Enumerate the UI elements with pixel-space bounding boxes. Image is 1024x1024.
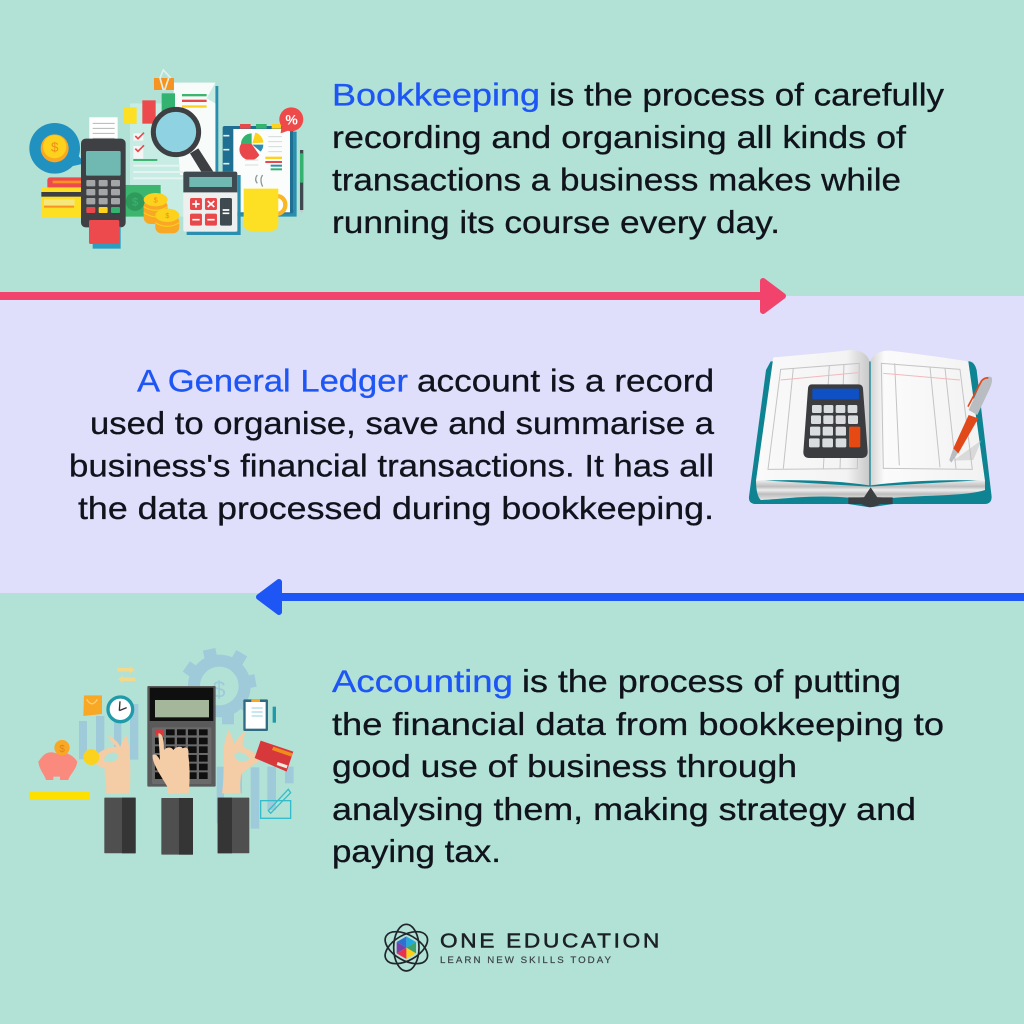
icon: accounting illustration xyxy=(29,648,294,855)
credit cards xyxy=(47,177,91,207)
text block: general ledger definition: account is a record xyxy=(417,362,714,398)
middle sleeve xyxy=(161,798,193,855)
red credit card xyxy=(255,741,293,772)
logo: One Education xyxy=(380,924,662,971)
piggy bank xyxy=(38,740,77,780)
arrow: red pointing right xyxy=(0,281,783,311)
text block: accounting definition: Accounting xyxy=(332,663,513,699)
cheque xyxy=(261,789,291,818)
background bars xyxy=(79,704,294,829)
text block: bookkeeping definition: recording and organising all kinds of xyxy=(332,119,906,155)
pie chart xyxy=(241,133,252,144)
exchange arrows xyxy=(117,666,135,683)
text block: general ledger definition: the data processed during bookkeeping. xyxy=(78,490,714,526)
right hand xyxy=(222,730,259,793)
checklist clipboard xyxy=(243,699,268,731)
text block: accounting definition: the financial data from bookkeeping to xyxy=(332,706,944,742)
left hand xyxy=(94,735,130,793)
percent badge xyxy=(279,107,303,131)
magnifier xyxy=(190,148,213,175)
coin xyxy=(83,749,99,765)
text block: bookkeeping definition xyxy=(332,76,944,240)
shopping bag xyxy=(83,695,102,716)
page block xyxy=(756,480,985,500)
text block: accounting definition: is the process of putting xyxy=(522,663,901,699)
text block: general ledger definition: business's financial transactions. It has all xyxy=(69,448,714,484)
text block: general ledger definition: used to organise, save and summarise a xyxy=(90,405,715,441)
inserted red card xyxy=(93,227,121,249)
book spine clasp xyxy=(848,487,893,507)
left page xyxy=(756,350,869,485)
text block: accounting definition: paying tax. xyxy=(332,833,501,869)
text block: accounting definition: analysing them, making strategy and xyxy=(332,791,916,827)
icon: bookkeeping illustration: $ xyxy=(132,197,139,209)
right page xyxy=(871,351,985,485)
document sheet xyxy=(215,86,218,220)
clock xyxy=(108,697,133,722)
yellow mug xyxy=(276,196,285,214)
speech bubble with coin xyxy=(29,123,80,174)
icon: bookkeeping illustration: $ xyxy=(51,139,59,154)
text block: general ledger definition xyxy=(69,362,715,526)
middle hand xyxy=(153,733,190,793)
card terminal xyxy=(89,117,118,147)
teal cover xyxy=(749,361,992,507)
logo mark: atom with hexagon xyxy=(380,924,433,971)
icon: open ledger book with calculator and pen xyxy=(749,350,992,507)
pencil xyxy=(300,150,303,210)
arrow: blue pointing left xyxy=(259,582,1024,612)
text block: general ledger definition: A General Ledger xyxy=(137,362,408,398)
large calculator xyxy=(147,686,216,787)
panel: general ledger band xyxy=(0,296,1024,593)
text block: accounting definition xyxy=(332,663,944,869)
text block: accounting definition: good use of business through xyxy=(332,748,797,784)
cash note xyxy=(120,185,161,217)
text block: bookkeeping definition: is the process of carefully xyxy=(549,76,944,112)
piggy bank: $ xyxy=(59,744,65,755)
left sleeve xyxy=(104,798,136,853)
bar chart blocks xyxy=(123,107,137,124)
logo wordmark: ONE EDUCATION xyxy=(440,930,662,952)
text block: bookkeeping definition: transactions a business makes while xyxy=(332,162,901,198)
orange bag xyxy=(154,78,174,90)
icon: bookkeeping illustration xyxy=(29,70,303,249)
pen xyxy=(949,377,992,463)
text block: bookkeeping definition: Bookkeeping xyxy=(332,76,540,112)
coin stacks xyxy=(144,200,179,233)
right sleeve xyxy=(218,798,249,853)
gear: $ xyxy=(212,676,225,702)
ledger ruling xyxy=(768,363,972,469)
checklist xyxy=(133,133,143,141)
gear xyxy=(183,648,257,724)
ruler xyxy=(29,792,90,800)
text block: bookkeeping definition: running its course every day. xyxy=(332,204,780,240)
logo tagline: LEARN NEW SKILLS TODAY xyxy=(440,955,613,966)
icon: bookkeeping illustration: $ xyxy=(154,195,158,204)
icon: bookkeeping illustration: % xyxy=(285,112,298,128)
icon: bookkeeping illustration: $ xyxy=(165,211,169,220)
calculator xyxy=(803,384,868,458)
clipboard report xyxy=(227,132,297,217)
desk calculator xyxy=(187,175,241,235)
